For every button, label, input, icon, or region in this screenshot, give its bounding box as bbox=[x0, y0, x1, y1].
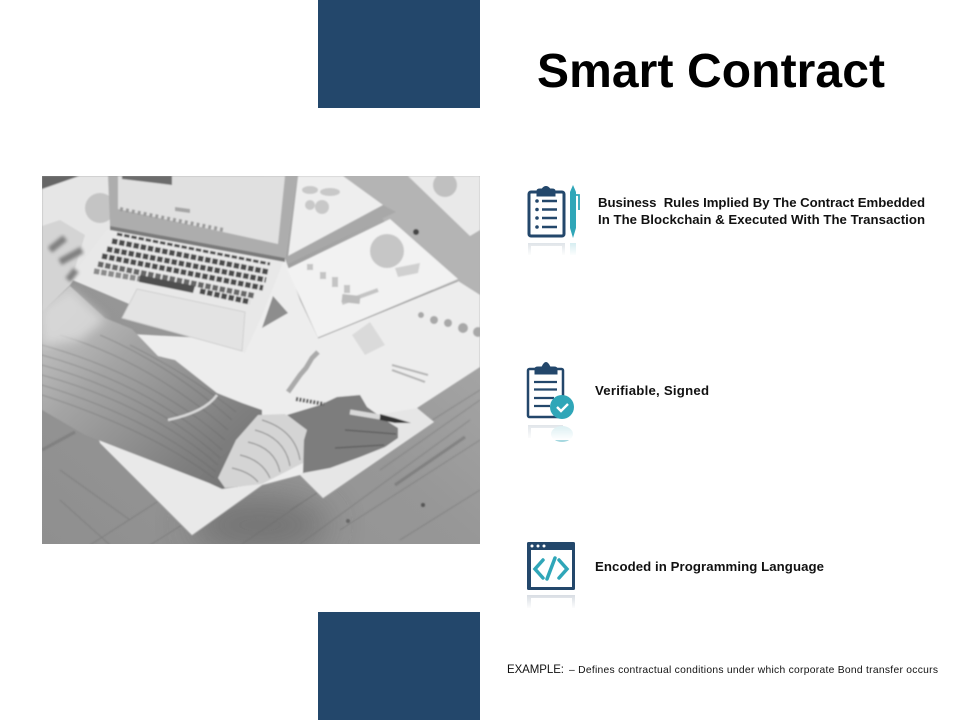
icon reflection 3 bbox=[525, 595, 577, 609]
paper charts bbox=[370, 234, 404, 268]
arm and sleeve bbox=[42, 286, 262, 489]
keyboard bbox=[94, 234, 270, 302]
papers bbox=[408, 176, 480, 236]
laptop screen bbox=[108, 176, 297, 258]
paper left of laptop bbox=[42, 176, 111, 284]
icon: clipboard with check badge bbox=[528, 362, 574, 419]
text: business rules: In The Blockchain & Executed With The Transaction bbox=[598, 212, 925, 227]
photo: hands working at laptop on a desk with paper charts bbox=[42, 173, 483, 553]
text: business rules: Business Rules Implied By The Contract Embedded bbox=[598, 195, 925, 210]
icon: browser window with code brackets bbox=[527, 542, 575, 590]
text: business rules bbox=[598, 195, 925, 227]
cuff bbox=[218, 414, 307, 488]
text: example note: – Defines contractual conditions under which corporate Bond transfer occurs bbox=[569, 665, 938, 676]
right hand bbox=[287, 395, 398, 473]
pen bbox=[296, 399, 324, 404]
text: encoded: Encoded in Programming Language bbox=[595, 559, 824, 574]
icon: clipboard with checklist and pen bbox=[529, 185, 579, 238]
text: verifiable: Verifiable, Signed bbox=[595, 383, 709, 398]
wood grain bbox=[42, 390, 480, 545]
bottom blue block bbox=[318, 612, 480, 720]
left hand bbox=[42, 220, 85, 312]
top blue block bbox=[318, 0, 480, 108]
title: Smart Contract bbox=[537, 45, 885, 98]
icon reflection 1 bbox=[525, 243, 580, 256]
laptop base bbox=[73, 226, 284, 340]
text: example note: EXAMPLE: bbox=[507, 664, 564, 676]
icon reflection 2 bbox=[525, 424, 575, 442]
